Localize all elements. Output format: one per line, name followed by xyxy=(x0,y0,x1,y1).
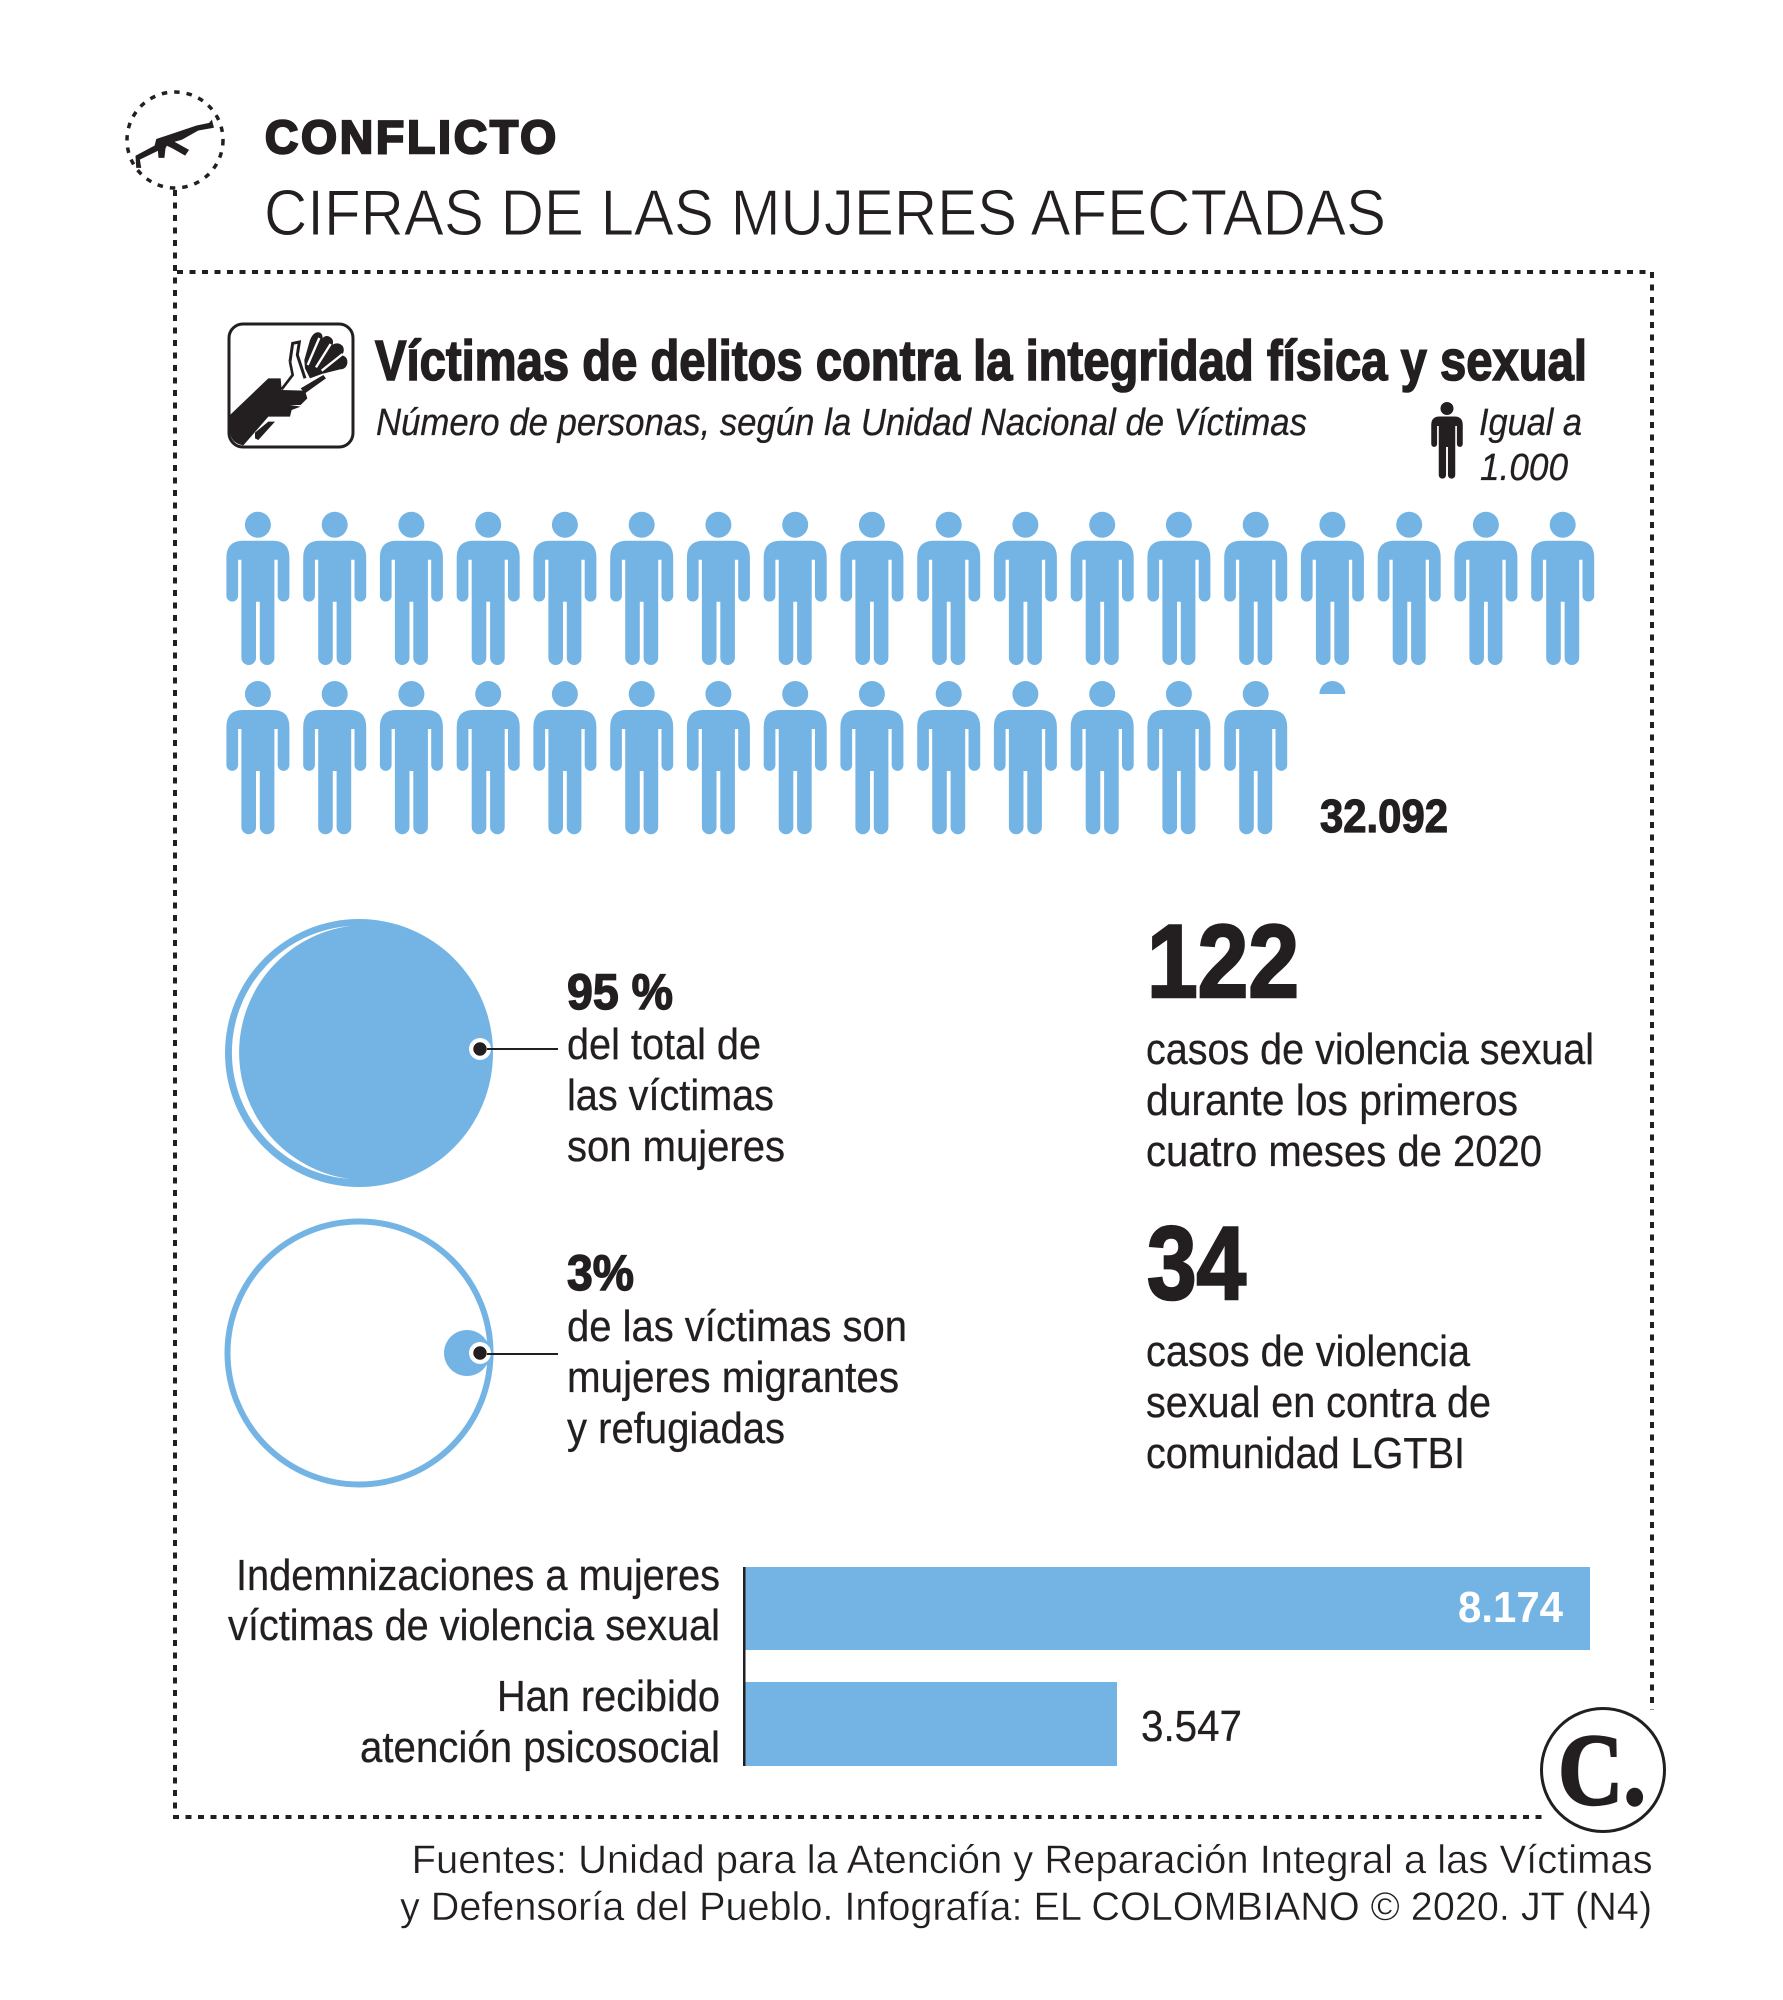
legend: one figure equals 1.000 xyxy=(1431,402,1582,489)
chart subtitle: Número de personas, según la Unidad Nacional de Víctimas xyxy=(376,402,1307,444)
pictogram: first row of figures xyxy=(226,512,1594,665)
stat: 122 cases: 122 xyxy=(1147,904,1299,1020)
stat: 34 cases xyxy=(1146,1206,1491,1478)
stat: 34 cases: comunidad LGTBI xyxy=(1146,1429,1465,1478)
stat: 122 cases: cuatro meses de 2020 xyxy=(1146,1127,1542,1176)
bar: atención psicosocial xyxy=(360,1672,1242,1772)
stat: 34 cases: sexual en contra de xyxy=(1146,1378,1491,1427)
text: 3 percent migrants and refugees: y refugiadas xyxy=(567,1404,785,1453)
legend: one figure equals 1.000: 1.000 xyxy=(1480,447,1568,489)
bar: atención psicosocial: atención psicosocial xyxy=(360,1723,720,1772)
bar: indemnizaciones: víctimas de violencia sexual xyxy=(228,1601,720,1650)
bar: indemnizaciones xyxy=(228,1551,1590,1650)
circle chart: 95 percent xyxy=(225,919,558,1187)
icon: rifle in dotted circle xyxy=(127,92,223,188)
source note xyxy=(400,1838,1653,1929)
title: CIFRAS DE LAS MUJERES AFECTADAS xyxy=(264,176,1386,249)
stat: 34 cases: casos de violencia xyxy=(1146,1327,1470,1376)
circle chart: 3 percent xyxy=(228,1222,558,1484)
bar: indemnizaciones: 8.174 xyxy=(1458,1583,1564,1632)
text: 3 percent migrants and refugees: mujeres migrantes xyxy=(567,1353,899,1402)
source note: y Defensoría del Pueblo. Infografía: EL COLOMBIANO © 2020. JT (N4) xyxy=(400,1885,1652,1929)
text: 95 percent of victims are women: 95 % xyxy=(567,964,673,1020)
text: 3 percent migrants and refugees: de las víctimas son xyxy=(567,1302,907,1351)
stat: 122 cases xyxy=(1146,904,1594,1176)
text: 95 percent of victims are women xyxy=(567,964,785,1171)
logo: El Colombiano: C. xyxy=(1558,1714,1646,1827)
bar: indemnizaciones: Indemnizaciones a mujeres xyxy=(236,1551,720,1600)
dotted frame xyxy=(175,190,1652,1817)
text: 95 percent of victims are women: del total de xyxy=(567,1020,761,1069)
text: 95 percent of victims are women: son mujeres xyxy=(567,1122,785,1171)
source note: Fuentes: Unidad para la Atención y Reparación Integral a las Víctimas xyxy=(412,1838,1653,1882)
bar: atención psicosocial: Han recibido xyxy=(497,1672,720,1721)
bar: atención psicosocial: 3.547 xyxy=(1141,1702,1242,1751)
stat: 122 cases: durante los primeros xyxy=(1146,1076,1518,1125)
total: 32.092: 32.092 xyxy=(1320,790,1448,842)
icon: hands xyxy=(229,324,353,447)
text: 3 percent migrants and refugees: 3% xyxy=(567,1245,634,1301)
stat: 122 cases: casos de violencia sexual xyxy=(1146,1025,1594,1074)
heading: conflicto: CONFLICTO xyxy=(265,111,556,163)
pictogram: second row of figures xyxy=(226,681,1345,834)
bar chart xyxy=(228,1551,1590,1772)
stat: 34 cases: 34 xyxy=(1147,1206,1246,1322)
legend: one figure equals 1.000: Igual a xyxy=(1479,402,1582,444)
text: 95 percent of victims are women: las víctimas xyxy=(567,1071,774,1120)
text: 3 percent migrants and refugees xyxy=(567,1245,907,1453)
